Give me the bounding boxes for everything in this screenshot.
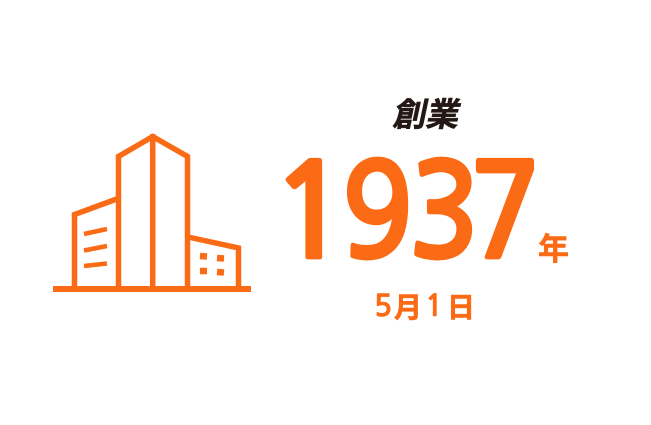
right building windows bbox=[200, 256, 224, 272]
left building bbox=[74, 198, 118, 289]
year unit: 年 bbox=[538, 224, 569, 269]
year number: 9 bbox=[341, 148, 414, 278]
date: 5 bbox=[374, 292, 392, 321]
heading: founding: 創業 bbox=[390, 87, 466, 136]
date: 1 bbox=[425, 292, 443, 321]
icon: office buildings bbox=[53, 134, 251, 289]
year number bbox=[269, 148, 542, 278]
year number: 1 bbox=[269, 149, 352, 278]
date: 日 bbox=[447, 286, 475, 326]
left building windows bbox=[84, 229, 107, 266]
ground line bbox=[53, 286, 251, 292]
central tower bbox=[118, 134, 188, 289]
right building bbox=[188, 237, 238, 289]
year number: 7 bbox=[469, 148, 542, 278]
date bbox=[374, 286, 475, 326]
year number: 3 bbox=[408, 148, 481, 278]
date: 月 bbox=[394, 286, 422, 326]
